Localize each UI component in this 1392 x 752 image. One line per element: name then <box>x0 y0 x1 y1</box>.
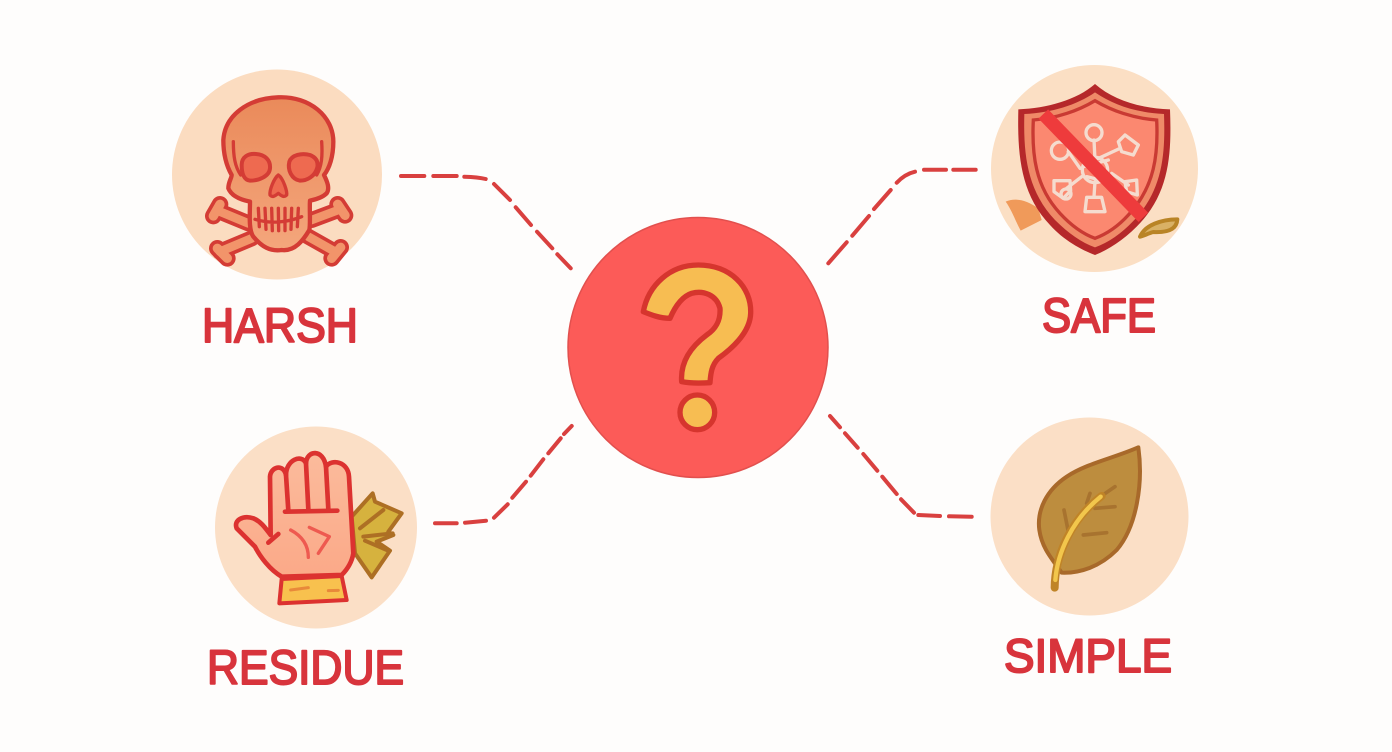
connector: simple to centre <box>830 416 972 517</box>
connector: harsh to centre <box>401 176 571 268</box>
label: SIMPLE: SIMPLE <box>1004 629 1172 682</box>
label: RESIDUE: RESIDUE <box>207 642 404 695</box>
icon: shield with crossed-out molecule <box>1006 84 1177 255</box>
icon: question mark <box>643 265 751 430</box>
centre circle with question mark <box>568 218 828 478</box>
panel: safe <box>991 65 1198 343</box>
label: SAFE: SAFE <box>1042 290 1156 343</box>
panel: residue <box>207 426 417 695</box>
connector: safe to centre <box>828 170 976 263</box>
panel: simple <box>990 418 1188 682</box>
icon: skull and crossbones <box>213 97 345 258</box>
label: HARSH: HARSH <box>202 300 358 353</box>
connector: residue to centre <box>435 426 572 523</box>
icon: leaf <box>1039 447 1140 588</box>
icon: hand with leaf <box>236 453 402 603</box>
panel: harsh <box>172 70 382 353</box>
